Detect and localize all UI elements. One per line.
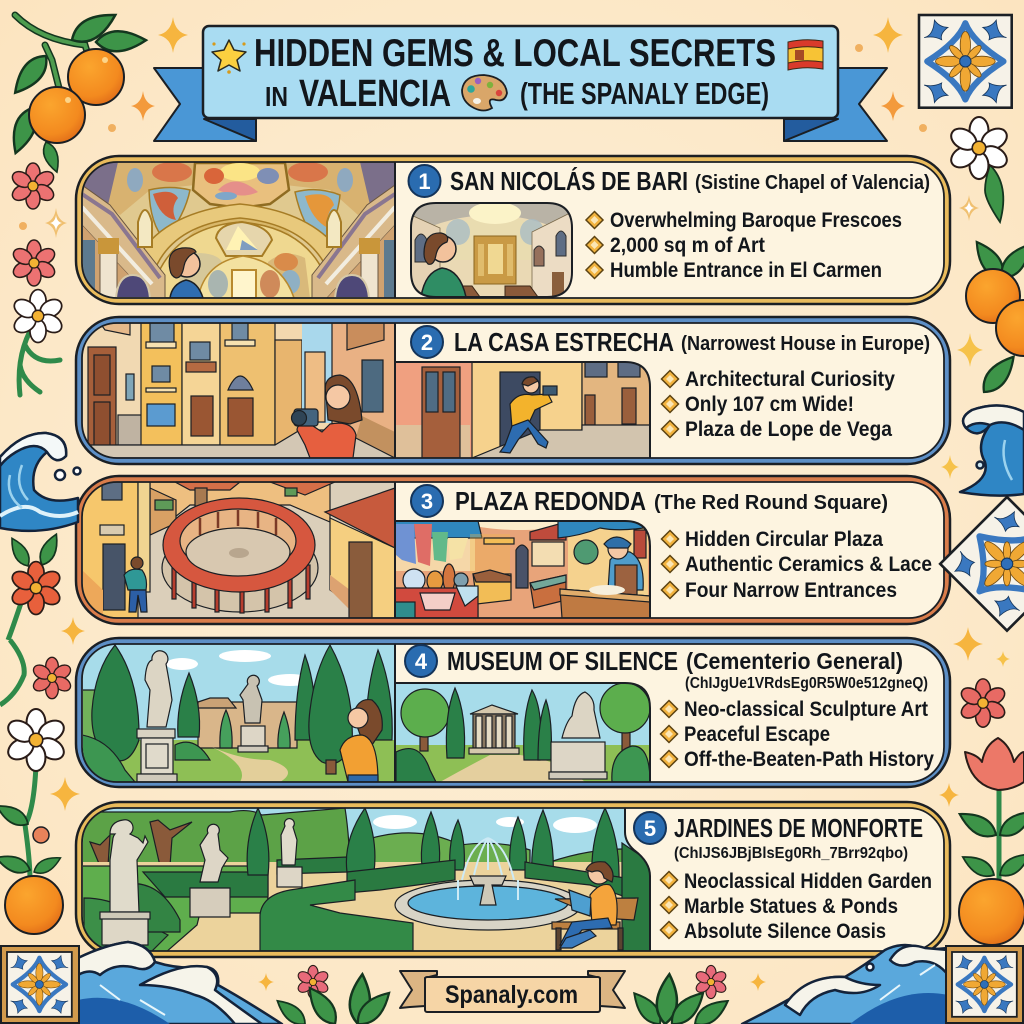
bullet list 5: Neoclassical Hidden Garden — [684, 870, 932, 893]
heading 5: JARDINES DE MONFORTE — [674, 813, 923, 843]
bullet list 4: Neo-classical Sculpture Art — [684, 698, 928, 721]
decoration: pink flowers — [10, 163, 57, 286]
icon: star — [212, 40, 246, 74]
bullet list 2: Architectural Curiosity — [685, 368, 895, 391]
decoration: top-left orange branch — [7, 6, 146, 174]
heading 4 — [447, 646, 903, 676]
decoration: top-right sparkles — [855, 17, 979, 221]
bullet list 4 — [660, 698, 934, 771]
panel 2: La Casa Estrecha — [76, 317, 950, 464]
illustration: market stalls — [395, 514, 650, 618]
illustration: narrow street with photographer — [82, 323, 396, 458]
heading 1: SAN NICOLÁS DE BARI — [450, 166, 688, 196]
decoration: white flower with stem — [11, 290, 65, 395]
left ribbon tail — [154, 68, 256, 141]
number badge 3: 3 — [421, 489, 433, 514]
decoration: white flower and lower-left orange — [0, 709, 80, 934]
heading 2 — [454, 327, 930, 357]
number badge 5 — [634, 812, 666, 844]
number badge 1: 1 — [418, 169, 431, 194]
title line 2: IN — [265, 81, 288, 112]
heading 2: LA CASA ESTRECHA — [454, 327, 674, 357]
bullet list 1: Humble Entrance in El Carmen — [610, 259, 882, 282]
decoration: bottom-left wave — [78, 942, 282, 1024]
bullet list 1: Overwhelming Baroque Frescoes — [610, 209, 902, 232]
footer ornaments left — [258, 965, 395, 1024]
frame — [78, 640, 948, 784]
decoration: rotated tile on right edge — [940, 497, 1024, 631]
illustration: round plaza — [82, 482, 396, 618]
heading 3: (The Red Round Square) — [654, 492, 888, 514]
bullet list 1 — [586, 209, 902, 282]
title line 1: HIDDEN GEMS & LOCAL SECRETS — [254, 32, 776, 75]
icon: Spanish flag — [788, 40, 823, 70]
bullet list 2: Plaza de Lope de Vega — [685, 418, 892, 441]
decoration: right tulip and orange — [955, 738, 1024, 945]
place id 4: (ChIJgUe1VRdsEg0R5W0e512gneQ) — [685, 675, 928, 692]
number badge 4 — [405, 645, 437, 677]
illustration: chapel interior — [411, 202, 572, 297]
decoration: right wave — [960, 405, 1024, 496]
bullet list 5 — [660, 870, 932, 943]
frame — [78, 158, 948, 302]
heading 4: MUSEUM OF SILENCE — [447, 646, 678, 676]
decoration: right pink flower — [958, 679, 1008, 727]
title banner — [154, 26, 887, 141]
panel 1: San Nicolás de Bari — [76, 156, 950, 304]
bullet list 4: Off-the-Beaten-Path History — [684, 748, 934, 771]
illustration: runner at the narrow house — [395, 362, 650, 458]
title line 2 — [265, 73, 451, 115]
number badge 3 — [411, 485, 443, 517]
place id 5: (ChIJS6JBjBlsEg0Rh_7Brr92qbo) — [674, 845, 908, 862]
illustration: sculpture garden — [82, 644, 396, 782]
decoration: top-left sparkles — [19, 17, 188, 238]
frame — [78, 478, 948, 622]
heading 1 — [450, 166, 930, 196]
decoration: left red flower with leaves and vine — [0, 531, 63, 705]
frame — [78, 320, 948, 462]
decoration: bottom-right wave — [742, 945, 948, 1024]
frame — [78, 804, 948, 954]
illustration: frescoed ceiling — [82, 162, 396, 298]
decoration: small pink flower left — [31, 657, 73, 699]
heading 4: (Cementerio General) — [686, 648, 903, 674]
decoration: left sparkle — [61, 617, 85, 645]
bullet list 3: Four Narrow Entrances — [685, 579, 897, 602]
decoration: bottom-right tile — [946, 946, 1023, 1023]
panel 3: Plaza Redonda — [76, 476, 950, 624]
heading 2: (Narrowest House in Europe) — [681, 333, 930, 355]
decoration: top-right tile — [919, 15, 1012, 108]
heading 3: PLAZA REDONDA — [455, 486, 646, 516]
bullet list 5: Marble Statues & Ponds — [684, 895, 898, 918]
number badge 1 — [408, 165, 440, 197]
heading 1: (Sistine Chapel of Valencia) — [695, 172, 930, 194]
bullet list 3: Hidden Circular Plaza — [685, 528, 883, 551]
bullet list 4: Peaceful Escape — [684, 723, 830, 746]
number badge 2: 2 — [421, 330, 433, 355]
decoration: bottom-left tile — [1, 946, 79, 1023]
right ribbon tail — [784, 68, 887, 141]
heading 3 — [455, 486, 888, 516]
illustration: garden with fountain and reader — [82, 808, 652, 953]
decoration: left wave — [0, 433, 80, 531]
bullet list 2: Only 107 cm Wide! — [685, 393, 854, 416]
title line 2: VALENCIA — [299, 73, 451, 115]
decoration: right white flower — [947, 117, 1011, 222]
bullet list 2 — [662, 368, 895, 441]
footer ornaments right — [628, 965, 766, 1024]
decoration: right sparkles — [939, 333, 1010, 807]
footer banner: Spanaly.com: Spanaly.com — [445, 981, 578, 1009]
icon: paint palette — [462, 75, 507, 110]
bullet list 5: Absolute Silence Oasis — [684, 920, 886, 943]
number badge 2 — [411, 326, 443, 358]
illustration: temple and thinker statue — [395, 683, 650, 782]
title line 2 suffix: (THE SPANALY EDGE) — [520, 76, 769, 111]
bullet list 3: Authentic Ceramics & Lace — [685, 553, 932, 576]
panel 4: Museum of Silence — [76, 638, 950, 787]
bullet list 3 — [662, 528, 932, 602]
panel 5: Jardines de Monforte — [76, 802, 950, 957]
number badge 5: 5 — [644, 816, 656, 841]
number badge 4: 4 — [415, 649, 428, 674]
bullet list 1: 2,000 sq m of Art — [610, 234, 765, 257]
decoration: right oranges — [966, 237, 1024, 398]
footer banner: Spanaly.com — [400, 971, 625, 1012]
